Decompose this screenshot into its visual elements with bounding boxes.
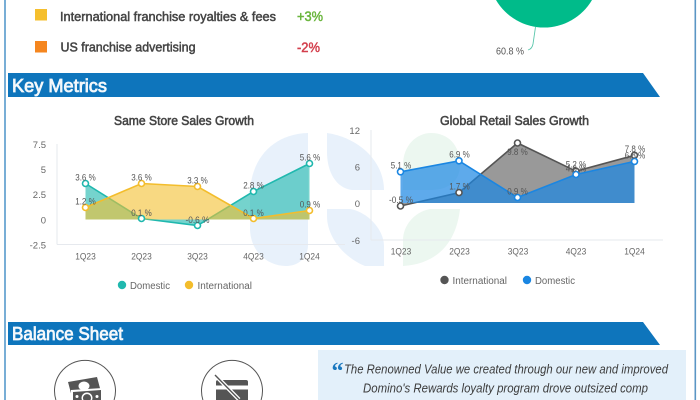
legend row: international franchise royalties: +3% (297, 8, 323, 24)
chart legend: Domestic (130, 281, 170, 292)
icon: cash (54, 360, 116, 400)
data labels: 1.7 % (449, 182, 470, 192)
data labels: 2.8 % (243, 180, 264, 192)
series: International (86, 184, 310, 220)
callout: management quote: Domino's Rewards loyalty program drove outsized comp (363, 380, 648, 396)
data labels: 0.9 % (300, 200, 321, 210)
chart legend (118, 281, 252, 292)
data labels: 6.9 % (449, 150, 470, 160)
axes: 2.5 (33, 190, 46, 201)
axes (30, 140, 345, 262)
axes: 0 (41, 216, 46, 226)
legend row: US franchise advertising: US franchise advertising (60, 40, 196, 54)
data labels: 0.1 % (243, 208, 264, 219)
markers (398, 140, 638, 209)
axes (349, 126, 663, 258)
axes: 12 (349, 126, 360, 137)
axes: -2.5 (30, 240, 46, 252)
axes: 1Q23 (391, 246, 411, 258)
chart: Same Store Sales Growth (30, 113, 345, 292)
data labels: 5.2 % (566, 160, 587, 170)
chart legend: International (452, 276, 507, 287)
series: Domestic (86, 164, 310, 226)
pie chart slice: 60.8 % (496, 46, 524, 58)
data labels: 3.6 % (131, 172, 152, 184)
chart title: Global Retail Sales Growth (440, 113, 589, 128)
banner: Balance Sheet: Balance Sheet (12, 323, 123, 344)
quote mark: “ (332, 359, 344, 385)
axes: 0 (355, 199, 360, 210)
banner: Key Metrics: Key Metrics (12, 75, 107, 96)
data labels: 0.9 % (507, 186, 528, 198)
axes: 5 (41, 165, 46, 176)
legend row: US franchise advertising (35, 39, 320, 55)
axes: 4Q23 (566, 246, 586, 258)
legend row: US franchise advertising: -2% (297, 39, 320, 55)
axes: 2Q23 (449, 246, 470, 258)
axes: 3Q23 (508, 246, 528, 258)
data labels: 6.8 % (625, 150, 646, 162)
axes: 6 (355, 162, 360, 174)
data labels (389, 144, 646, 206)
axes: 3Q23 (187, 252, 208, 262)
callout: management quote (318, 350, 686, 400)
data labels (75, 152, 321, 226)
data labels: 5.6 % (300, 152, 321, 164)
icon: crossed-out card (201, 360, 262, 400)
markers (82, 160, 312, 228)
data labels: -0.5 % (389, 195, 413, 206)
data labels: 1.2 % (75, 196, 96, 208)
chart title: Same Store Sales Growth (114, 113, 254, 128)
banner: Balance Sheet (8, 322, 660, 345)
axes: 7.5 (33, 140, 46, 151)
axes: 1Q23 (75, 252, 96, 262)
data labels: 0.1 % (131, 208, 152, 219)
series: International (400, 143, 634, 206)
data labels: -0.6 % (186, 215, 210, 226)
axes: -6 (352, 236, 360, 247)
chart legend: Domestic (535, 276, 575, 287)
data labels: 3.6 % (75, 172, 96, 184)
data labels: 9.8 % (507, 147, 528, 158)
data labels: 5.1 % (391, 160, 412, 172)
legend row: international franchise royalties: International franchise royalties & fees (60, 9, 276, 24)
pie chart slice (496, 0, 592, 58)
data labels: 4.6 % (566, 164, 587, 174)
data labels: 3.3 % (187, 176, 208, 186)
axes: 4Q23 (243, 252, 264, 262)
data labels: 7.8 % (625, 144, 646, 155)
axes: 2Q23 (131, 252, 152, 262)
axes: 1Q24 (299, 252, 320, 262)
axes: 1Q24 (624, 246, 645, 258)
series: Domestic (400, 161, 634, 203)
chart legend: International (198, 281, 252, 292)
chart: Global Retail Sales Growth (349, 113, 663, 287)
banner: Key Metrics (8, 73, 660, 97)
chart legend (440, 276, 575, 287)
watermark logo (250, 133, 460, 266)
